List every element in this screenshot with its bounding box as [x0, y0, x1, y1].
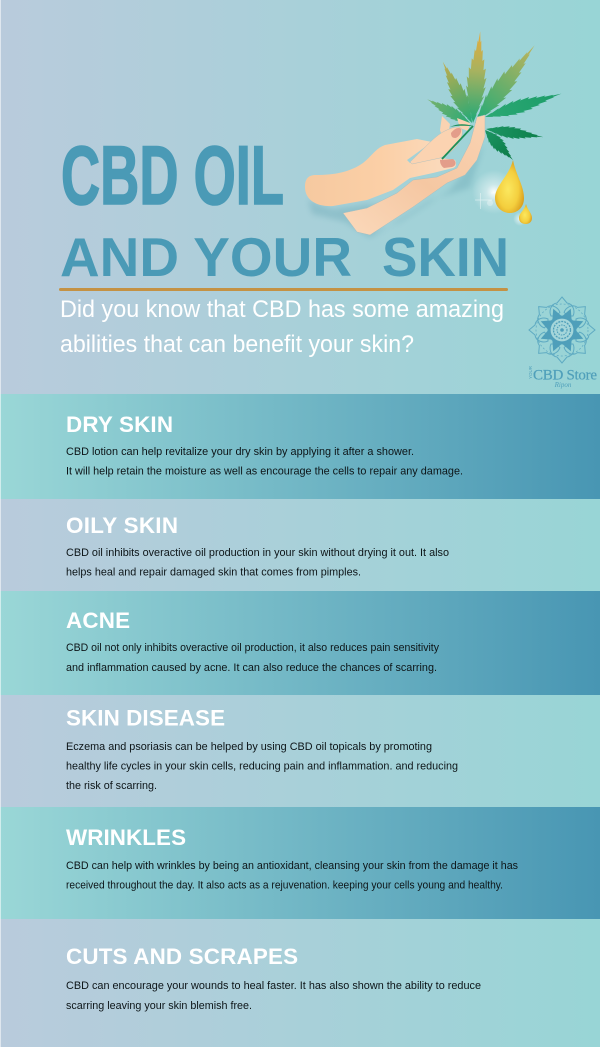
- logo wordmark: YOUR: [528, 365, 533, 379]
- body text: [66, 741, 458, 792]
- title: CBD OIL: CBD OIL: [61, 128, 284, 222]
- body text: helps heal and repair damaged skin that comes from pimples.: [66, 566, 361, 578]
- body text: and inflammation caused by acne. It can also reduce the chances of scarring.: [66, 662, 437, 674]
- shadow under hand: [308, 145, 484, 238]
- body text: CBD oil inhibits overactive oil production in your skin without drying it out. It also: [66, 547, 449, 559]
- nails: [451, 128, 461, 138]
- heading: WRINKLES: [66, 825, 186, 850]
- body text: [66, 860, 518, 892]
- body text: CBD can encourage your wounds to heal faster. It has also shown the ability to reduce: [66, 980, 481, 992]
- body text: [66, 980, 481, 1012]
- icon: small oil drop: [519, 204, 532, 224]
- panel: oily skin: [0, 499, 600, 591]
- index finger: [410, 127, 462, 164]
- heading: SKIN DISEASE: [66, 706, 225, 730]
- back fingers: [440, 116, 450, 133]
- icon: cannabis leaf: [424, 31, 564, 164]
- icon: large oil drop: [495, 160, 524, 213]
- body text: Eczema and psoriasis can be helped by using CBD oil topicals by promoting: [66, 741, 432, 753]
- body text: received throughout the day. It also acts as a rejuvenation. keeping your cells young and healthy.: [66, 880, 503, 892]
- body text: CBD lotion can help revitalize your dry skin by applying it after a shower.: [66, 446, 414, 458]
- heading: OILY SKIN: [66, 513, 178, 538]
- panel: skin disease: [0, 695, 600, 807]
- panel: dry skin: [0, 394, 600, 499]
- upper hand: [305, 139, 456, 206]
- glow and sparkles: [472, 170, 516, 214]
- left edge highlight: [0, 0, 1, 1047]
- logo wordmark: CBD Store: [533, 368, 597, 384]
- intro text: Did you know that CBD has some amazing: [60, 296, 504, 323]
- panel: cuts and scrapes: [0, 919, 600, 1047]
- panel: header background: [0, 0, 600, 394]
- heading: ACNE: [66, 608, 130, 633]
- heading: CUTS AND SCRAPES: [66, 944, 298, 969]
- intro text: [60, 296, 504, 358]
- illustration: hand holding cannabis leaf with oil drops: [305, 31, 564, 238]
- body text: scarring leaving your skin blemish free.: [66, 1000, 252, 1012]
- heading: DRY SKIN: [66, 412, 173, 437]
- leaf stem: [442, 126, 473, 159]
- body text: It will help retain the moisture as well as encourage the cells to repair any damage.: [66, 466, 463, 478]
- body text: [66, 446, 463, 478]
- lower hand: [343, 115, 485, 235]
- body text: CBD can help with wrinkles by being an antioxidant, cleansing your skin from the damage it has: [66, 860, 518, 872]
- body text: healthy life cycles in your skin cells, reducing pain and inflammation. and reducing: [66, 760, 458, 772]
- body text: [66, 547, 449, 578]
- divider line: [59, 288, 508, 291]
- body text: [66, 642, 440, 674]
- body text: CBD oil not only inhibits overactive oil production, it also reduces pain sensitivity: [66, 642, 440, 654]
- icon: mandala: [529, 297, 595, 363]
- panel: acne: [0, 591, 600, 695]
- logo: Your CBD Store Ripon: [528, 297, 597, 389]
- title: AND YOUR SKIN: [60, 226, 509, 288]
- intro text: abilities that can benefit your skin?: [60, 331, 414, 358]
- body text: the risk of scarring.: [66, 780, 157, 792]
- title: AND YOUR SKIN: AND YOUR: [60, 226, 352, 288]
- panel: wrinkles: [0, 807, 600, 919]
- logo wordmark: [528, 365, 597, 389]
- logo wordmark: Ripon: [554, 381, 572, 389]
- title: AND YOUR SKIN: SKIN: [382, 226, 509, 288]
